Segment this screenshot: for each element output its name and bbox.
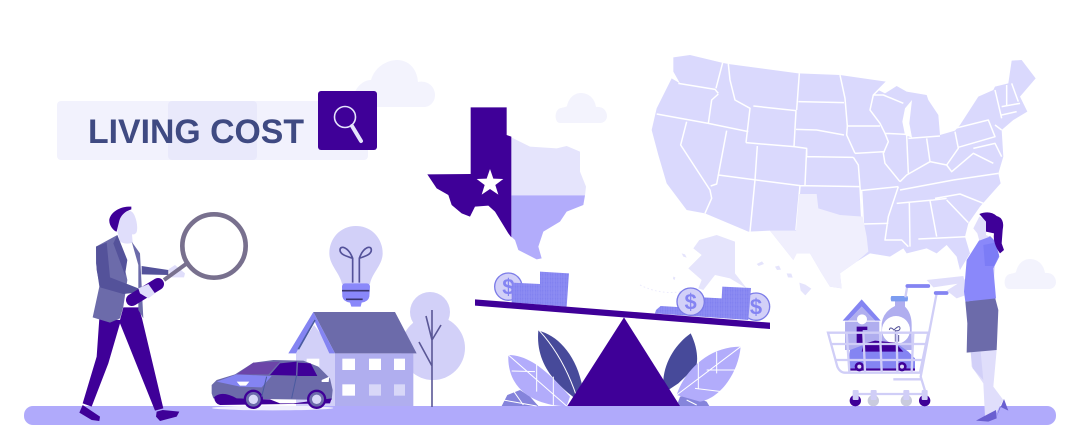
coins: right stack: $ xyxy=(750,294,762,319)
car xyxy=(212,360,333,410)
cart: frame xyxy=(828,286,937,394)
house xyxy=(288,312,417,406)
woman: far arm xyxy=(927,267,995,298)
coins: left stack: $ xyxy=(502,274,514,299)
man: far hand xyxy=(168,265,185,277)
illustration elements in zoomed coordinates (left) xyxy=(79,207,417,421)
man: shoes xyxy=(79,405,179,421)
icon: star xyxy=(477,169,503,195)
woman: shoes xyxy=(976,399,1008,422)
cloud: right xyxy=(1005,259,1056,289)
man with magnifying glass xyxy=(79,207,246,421)
map: Texas highlighted xyxy=(770,194,868,288)
cloud: centre xyxy=(556,93,607,123)
map: Aleutian chain xyxy=(640,285,682,292)
ground xyxy=(24,406,1056,425)
map: Lake Michigan xyxy=(902,100,912,138)
title text: LIVING COST xyxy=(88,113,304,151)
coins: right stack xyxy=(655,287,770,320)
cart: bulb xyxy=(882,316,910,344)
cart: bottle xyxy=(882,298,912,350)
seesaw with coins and leaves xyxy=(475,272,770,406)
cart contents xyxy=(843,296,915,371)
man: jacket xyxy=(93,235,143,323)
cloud: behind title xyxy=(353,60,435,107)
woman: face and neck xyxy=(973,217,990,241)
cart: car xyxy=(848,342,915,368)
seesaw fulcrum xyxy=(567,317,680,406)
cart: house xyxy=(845,322,879,350)
map: United States xyxy=(640,55,1036,295)
icon: light bulb xyxy=(329,226,383,307)
magnifying glass xyxy=(132,214,246,300)
title bar xyxy=(57,101,368,160)
map: Alaska xyxy=(688,235,747,290)
woman: sleeve xyxy=(983,243,999,266)
cart: wheels xyxy=(850,390,930,406)
Texas flag: white-lilac stripe xyxy=(511,137,586,195)
coins: right stack: $ xyxy=(685,289,697,314)
man: neck and face xyxy=(117,210,137,244)
woman: skirt xyxy=(965,297,998,353)
shopping cart and woman xyxy=(828,212,1008,422)
woman: torso xyxy=(964,236,999,302)
map: state borders xyxy=(657,63,1020,247)
Texas flag: dark panel xyxy=(427,107,511,237)
leaves xyxy=(502,331,741,406)
coins: left stack xyxy=(495,272,569,307)
Texas flag: lavender stripe xyxy=(511,195,585,259)
cart: handles xyxy=(907,286,947,293)
icon: search button xyxy=(318,91,377,150)
Texas flag map xyxy=(427,107,586,259)
map: Aleutian and Hawaiian islands xyxy=(673,253,811,295)
man: legs xyxy=(83,307,163,411)
woman: legs xyxy=(971,350,1003,417)
man: sleeve xyxy=(96,235,138,294)
man: hair xyxy=(109,207,131,232)
map: contiguous states xyxy=(652,55,1036,288)
man: near hand xyxy=(138,284,155,298)
tree xyxy=(401,292,465,407)
man: far arm xyxy=(142,266,168,275)
seesaw beam xyxy=(475,299,770,329)
woman: hair xyxy=(979,212,1004,253)
woman xyxy=(927,212,1008,422)
